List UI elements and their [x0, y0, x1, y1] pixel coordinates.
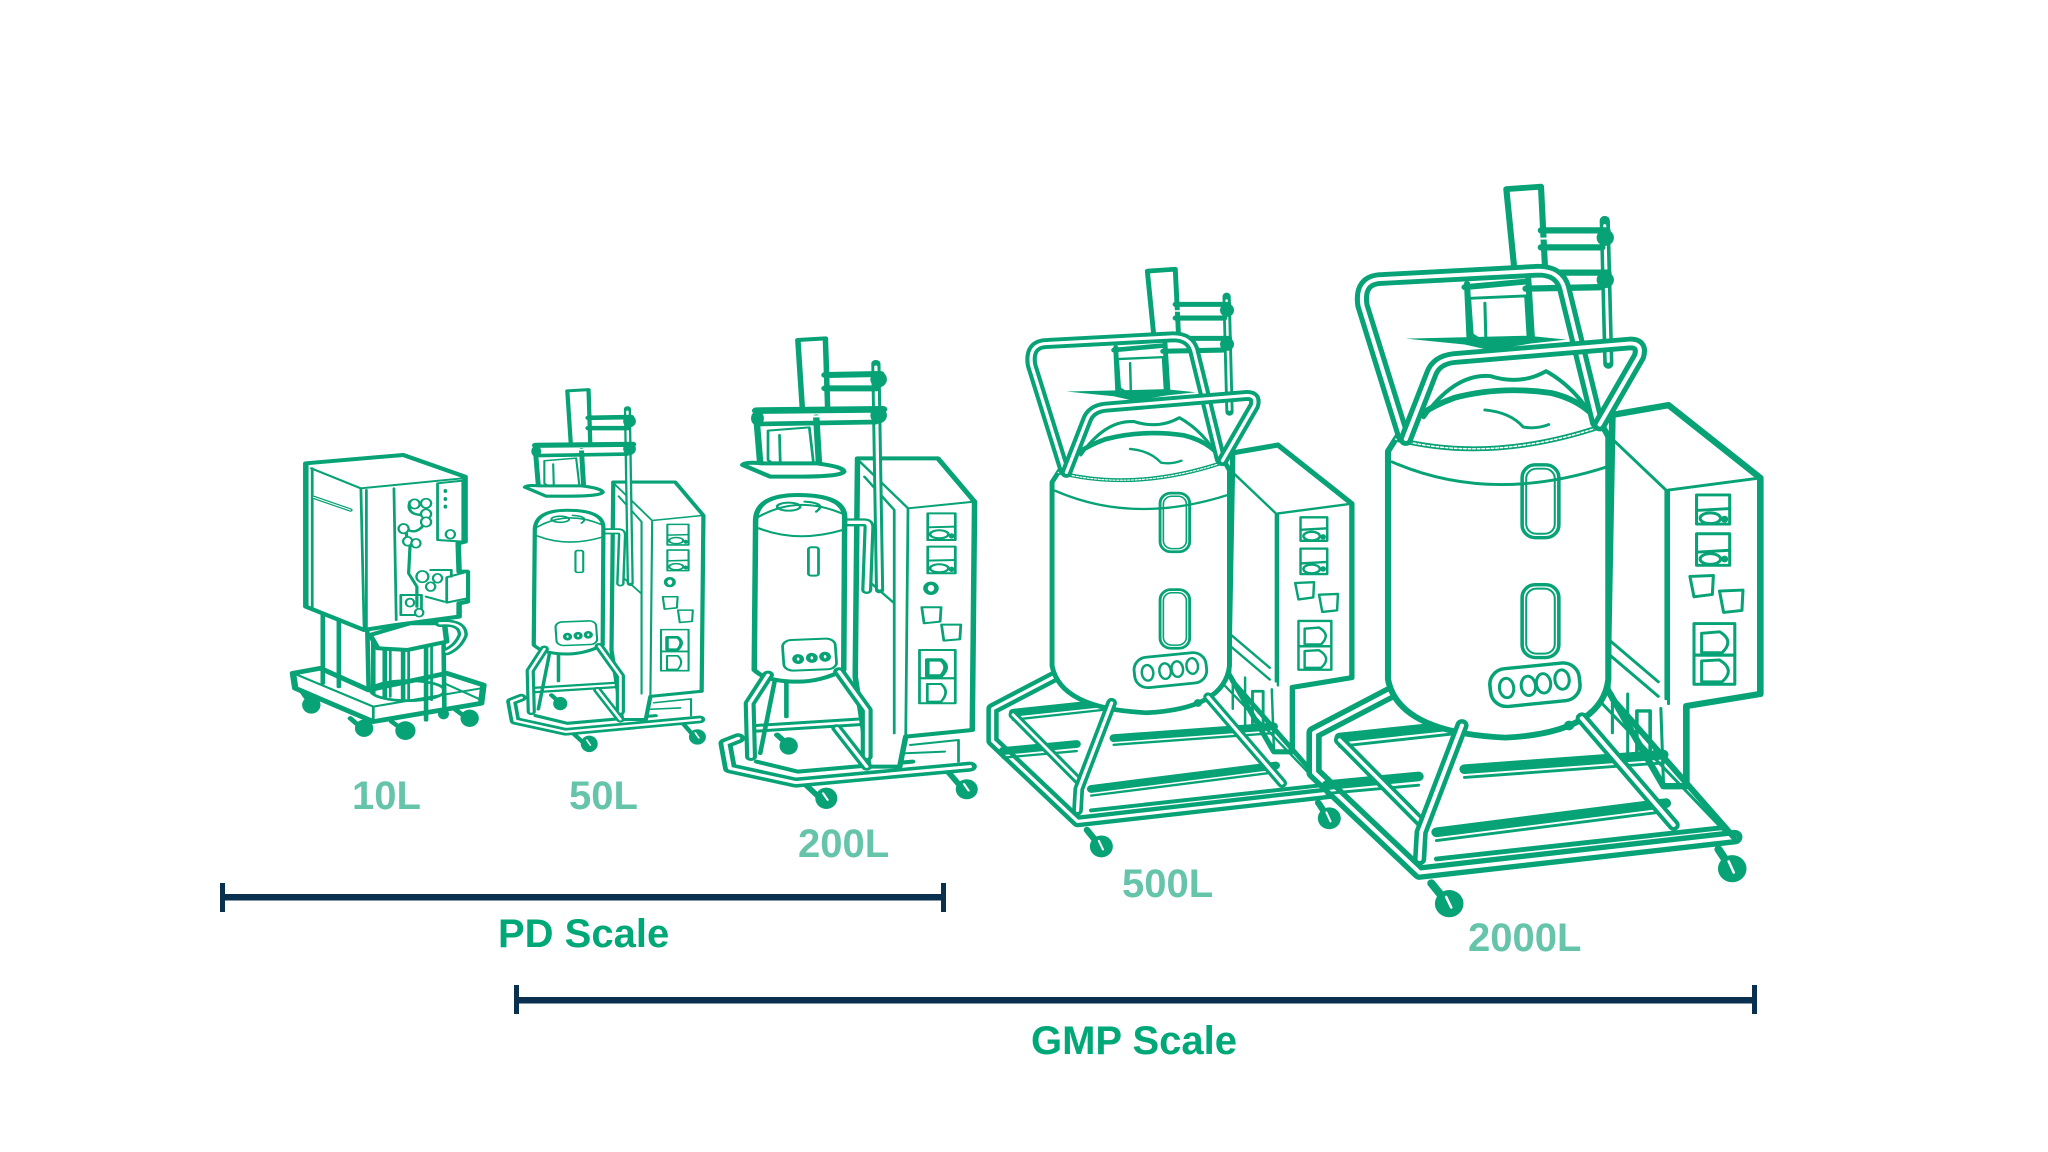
heading: PD Scale: PD Scale	[498, 912, 669, 956]
icon: 10L bioreactor	[293, 455, 483, 740]
label: 200L: 200L	[798, 822, 889, 866]
icon: 2000L bioreactor	[1314, 187, 1760, 917]
icon: 500L bioreactor	[993, 269, 1352, 857]
label: 500L: 500L	[1122, 862, 1213, 906]
icon: 200L bioreactor	[725, 338, 978, 809]
label: 10L: 10L	[352, 774, 421, 818]
label: 50L: 50L	[569, 774, 638, 818]
label: 2000L: 2000L	[1468, 916, 1581, 960]
bracket: GMP scale range	[514, 985, 1757, 1014]
heading: GMP Scale: GMP Scale	[1031, 1019, 1237, 1063]
bracket: PD scale range	[220, 883, 946, 912]
icon: 50L bioreactor	[511, 390, 706, 752]
